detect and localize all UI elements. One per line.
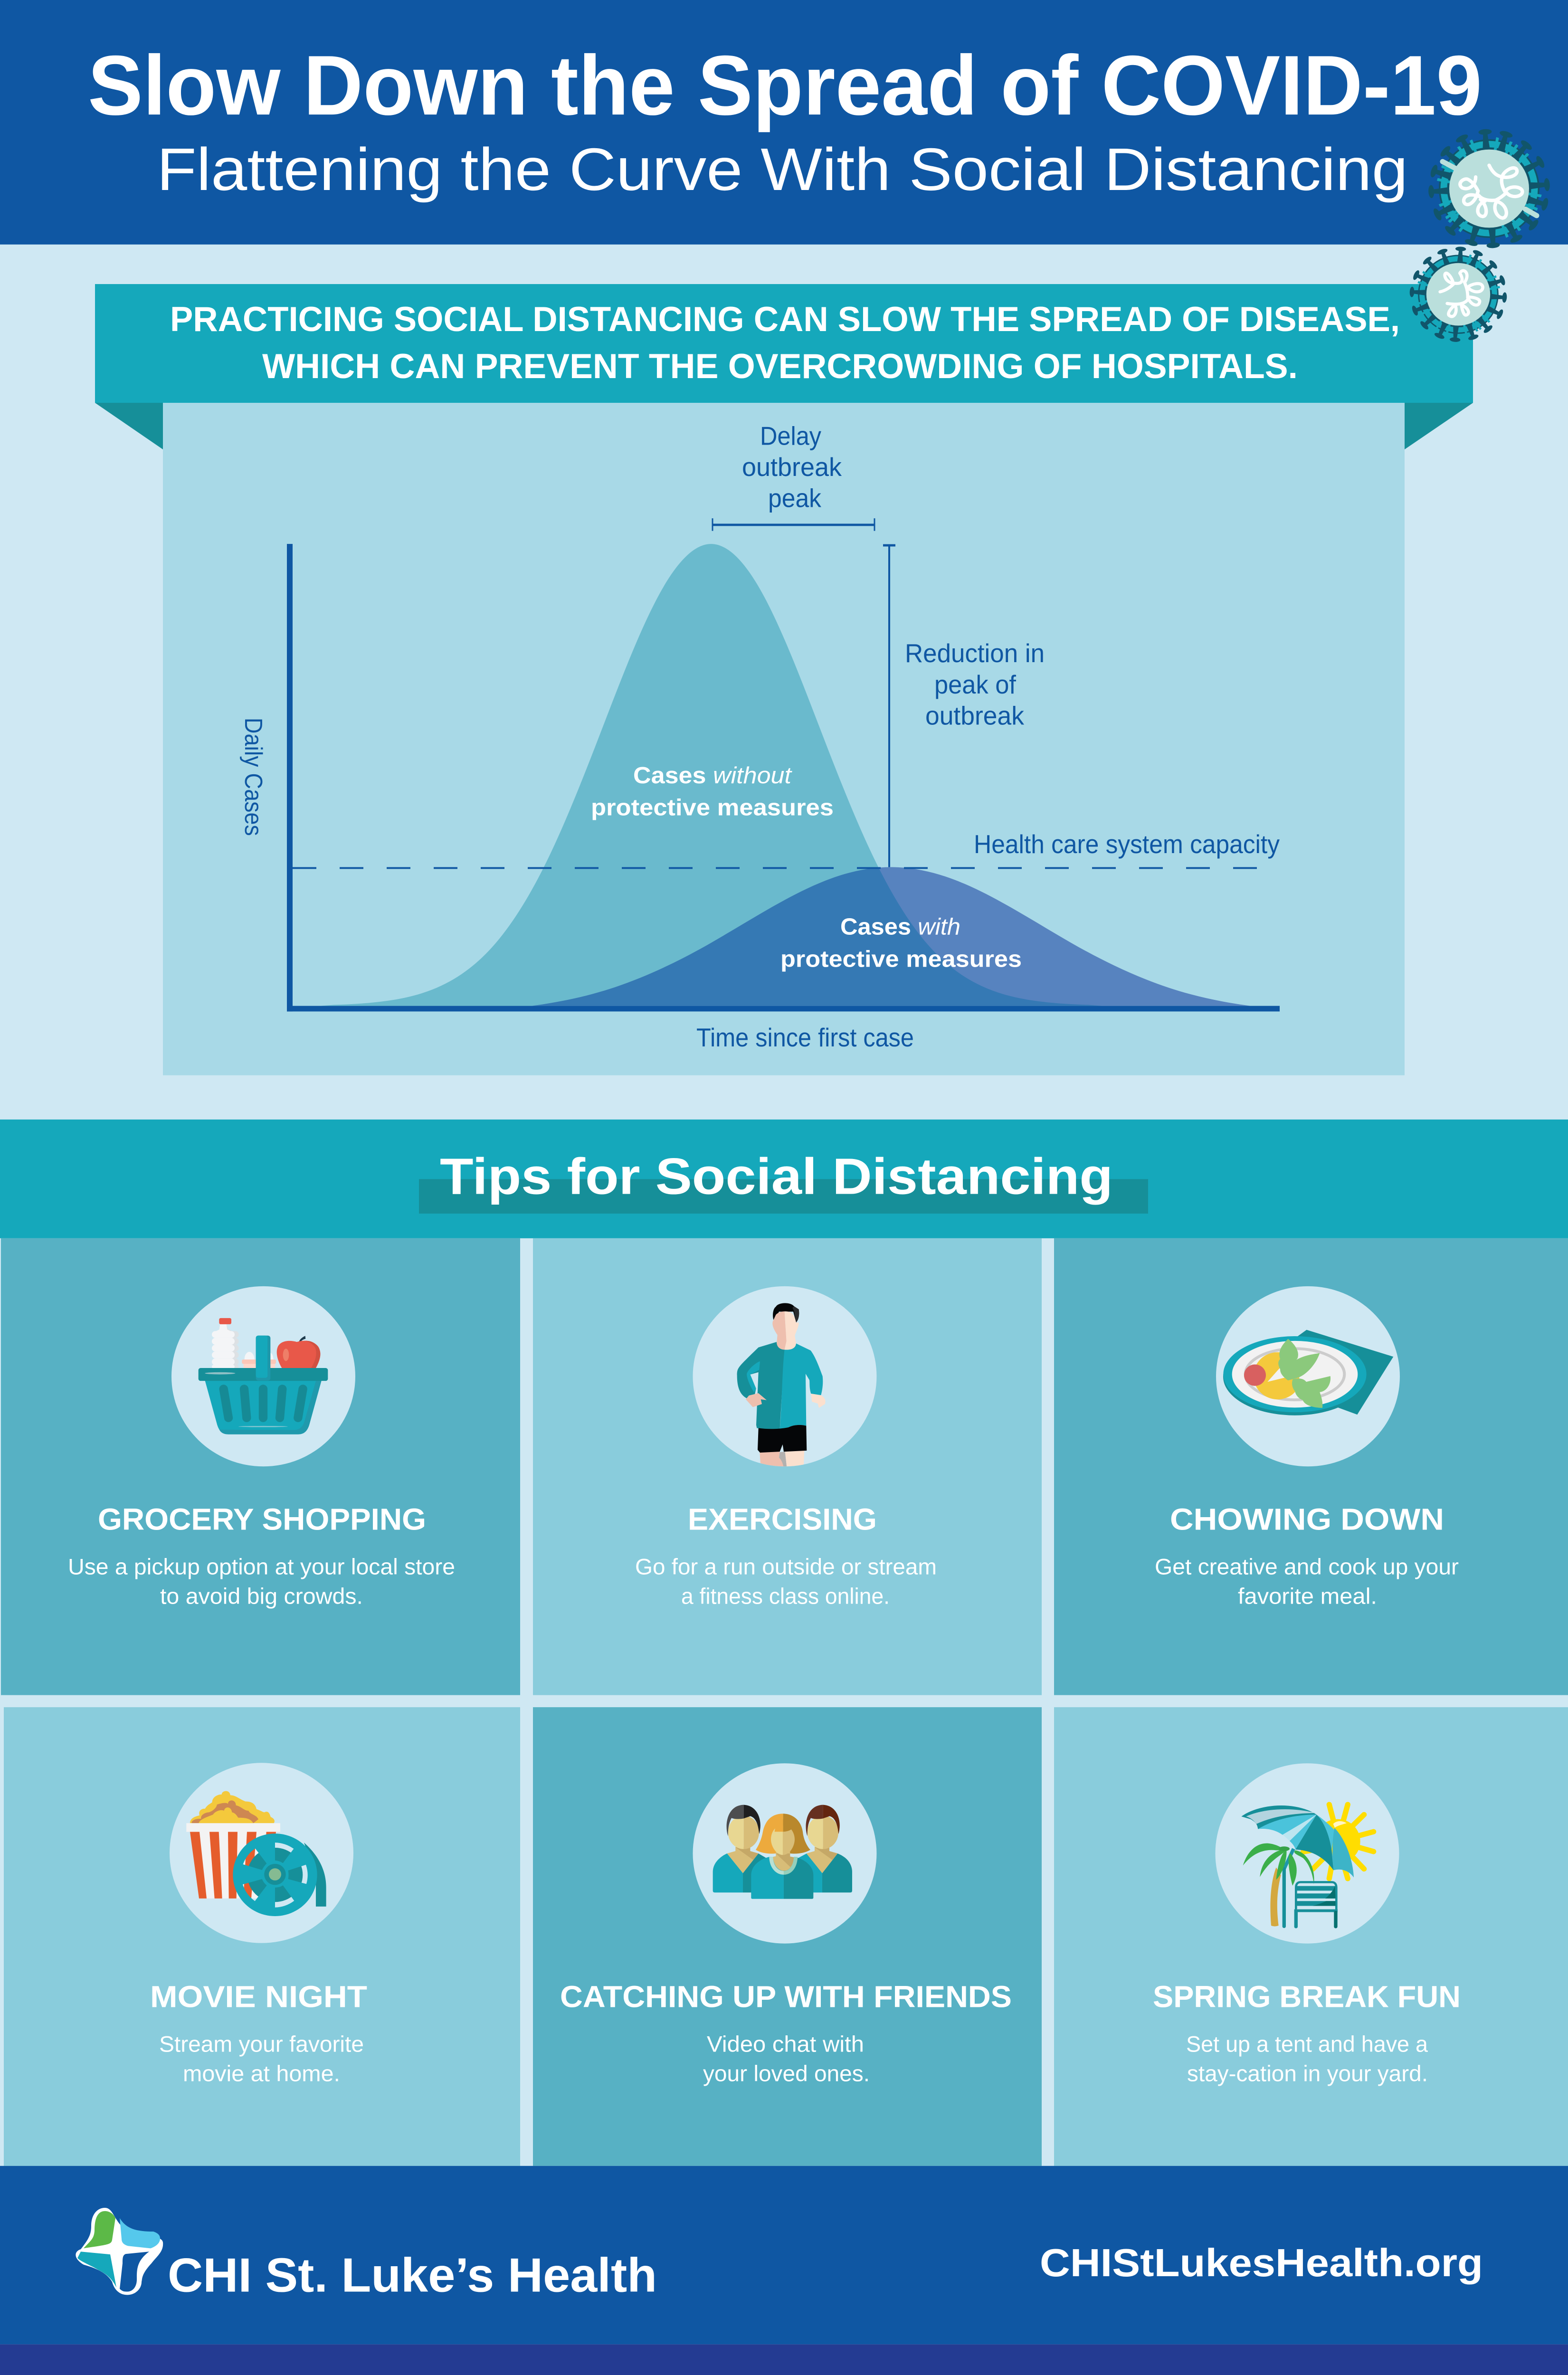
panel: flatten the curve chart background <box>163 402 1405 1075</box>
label: reduction in peak: peak of <box>934 670 1017 699</box>
icon: small virus <box>1409 247 1507 342</box>
reduction line <box>883 545 895 867</box>
text: spring break tip: stay-cation in your yard. <box>1187 2062 1428 2086</box>
panel: chowing down <box>1054 1238 1568 1695</box>
text: exercising tip: a fitness class online. <box>681 1584 890 1609</box>
label: delay outbreak peak: Delay <box>760 421 821 450</box>
heading: spring break fun: SPRING BREAK FUN <box>1153 1980 1461 2014</box>
logo wordmark: CHI St. Luke’s Health <box>168 2248 657 2302</box>
axes <box>287 544 1280 1011</box>
label: delay outbreak peak: outbreak <box>742 452 842 482</box>
panel: movie night <box>4 1707 520 2166</box>
heading: exercising: EXERCISING <box>688 1502 877 1536</box>
text: exercising tip <box>635 1555 937 1609</box>
label: delay outbreak peak: peak <box>768 484 821 513</box>
text: grocery shopping tip: to avoid big crowds. <box>160 1584 363 1609</box>
delay bracket <box>713 518 874 531</box>
icon: runner <box>737 1303 826 1468</box>
icon: three friends <box>713 1805 852 1899</box>
chart: epidemic curves <box>240 421 1280 1052</box>
text: chowing down tip: Get creative and cook up your <box>1155 1555 1459 1580</box>
heading: grocery shopping: GROCERY SHOPPING <box>98 1502 426 1536</box>
label: without measures: protective measures <box>591 795 834 821</box>
ribbon text: WHICH CAN PREVENT THE OVERCROWDING OF HOSPITALS. <box>262 347 1298 386</box>
icon: plate of food <box>1223 1330 1393 1416</box>
heading: tips: Tips for Social Distancing <box>440 1148 1113 1205</box>
heading: movie night: MOVIE NIGHT <box>150 1980 367 2014</box>
text: movie night tip: Stream your favorite <box>159 2032 364 2057</box>
panel: grocery shopping <box>1 1238 520 1695</box>
label: with measures: Cases with <box>840 914 960 940</box>
panel: exercising <box>533 1238 1042 1695</box>
label: without measures <box>591 762 834 821</box>
capacity dashed line <box>293 867 1280 869</box>
text: movie night tip <box>159 2032 364 2086</box>
ribbon text: PRACTICING SOCIAL DISTANCING CAN SLOW THE SPREAD OF DISEASE, <box>170 300 1400 339</box>
footer <box>0 2166 1568 2375</box>
text: friends tip: Video chat with <box>707 2032 864 2057</box>
website url: CHIStLukesHealth.org <box>1040 2241 1483 2285</box>
icon: beach umbrella, palm and sun <box>1241 1805 1374 1928</box>
panel: catching up with friends <box>533 1707 1042 2166</box>
ribbon text <box>170 300 1400 386</box>
logo: cross mark <box>76 2208 163 2295</box>
text: spring break tip <box>1186 2032 1428 2086</box>
label: without measures: Cases without <box>633 762 792 788</box>
text: movie night tip: movie at home. <box>183 2062 340 2086</box>
title: Slow Down the Spread of COVID-19 <box>88 38 1482 133</box>
label: capacity: Health care system capacity <box>974 830 1280 859</box>
text: spring break tip: Set up a tent and have a <box>1186 2032 1428 2057</box>
label: delay outbreak peak <box>742 421 842 513</box>
text: friends tip <box>703 2032 870 2086</box>
label: reduction in peak <box>905 639 1045 730</box>
curve: cases with protective measures <box>532 867 1250 1006</box>
label: with measures: protective measures <box>780 946 1022 972</box>
text: friends tip: your loved ones. <box>703 2062 870 2086</box>
label: reduction in peak: outbreak <box>925 701 1024 730</box>
curve: cases without protective measures <box>320 544 1102 1006</box>
label: y axis: Daily Cases <box>240 718 267 836</box>
icon: large virus <box>1428 129 1550 248</box>
section band: tips heading <box>0 1120 1568 1238</box>
icon: grocery basket <box>199 1318 328 1434</box>
heading: catching up with friends: CATCHING UP WITH FRIENDS <box>560 1980 1012 2014</box>
label: with measures <box>780 914 1022 972</box>
header banner <box>0 0 1568 245</box>
label: reduction in peak: Reduction in <box>905 639 1045 668</box>
text: chowing down tip: favorite meal. <box>1238 1584 1377 1609</box>
text: exercising tip: Go for a run outside or stream <box>635 1555 937 1580</box>
ribbon banner <box>95 284 1473 449</box>
icon: popcorn and film reel <box>186 1791 326 1916</box>
text: grocery shopping tip <box>68 1555 455 1609</box>
text: grocery shopping tip: Use a pickup option at your local store <box>68 1555 455 1580</box>
text: chowing down tip <box>1155 1555 1459 1609</box>
panel: spring break fun <box>1054 1707 1568 2166</box>
heading: chowing down: CHOWING DOWN <box>1170 1502 1444 1536</box>
label: x axis: Time since first case <box>696 1023 914 1052</box>
subtitle: Flattening the Curve With Social Distancing <box>157 136 1408 203</box>
